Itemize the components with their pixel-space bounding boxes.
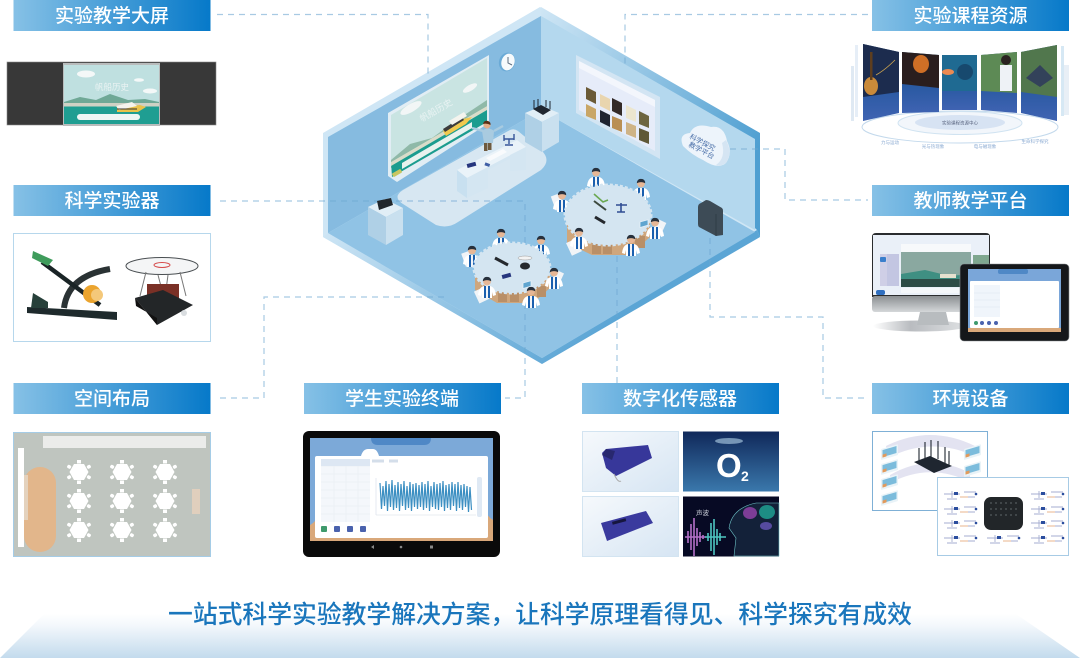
curriculum carousel: 光与热现象 [922, 143, 945, 150]
cloud [682, 125, 730, 166]
big screen on left wall: 帆船历史 [418, 96, 454, 124]
curriculum carousel: 力与运动 [881, 139, 899, 146]
heading: 实验教学大屏: 实验教学大屏 [55, 5, 169, 27]
heading: 空间布局 [14, 383, 210, 414]
heading: 实验课程资源: 实验课程资源 [913, 5, 1028, 27]
teacher [472, 121, 503, 151]
curriculum carousel: 电与磁现象 [974, 143, 997, 150]
network equipment cards [872, 432, 1068, 556]
round table group B [551, 168, 666, 256]
heading: 学生实验终端 [304, 383, 501, 414]
sensor cards: 2 [741, 468, 749, 484]
classroom furniture [368, 50, 730, 308]
heading: 环境设备 [872, 383, 1069, 414]
teacher platform [398, 129, 546, 226]
left wall [328, 16, 541, 233]
curriculum carousel [851, 44, 1069, 150]
curriculum carousel: 生命科学探究 [1022, 138, 1049, 145]
cloud: 科学探究 [688, 132, 717, 153]
clock [496, 50, 518, 74]
big screen on left wall [388, 55, 489, 182]
curriculum carousel: 实验课程资源中心 [942, 120, 978, 126]
blackboard with screen [7, 62, 216, 126]
teacher desk [457, 134, 526, 198]
cube with projector [368, 198, 403, 245]
heading: 科学实验器 [14, 185, 210, 216]
sensor cards: 声波 [696, 508, 710, 517]
sensor cards: O [716, 447, 742, 484]
blackboard with screen: 帆船历史 [95, 82, 130, 92]
student tablet with waveform [303, 431, 500, 557]
cube with router [525, 99, 559, 152]
bottom slogan: 一站式科学实验教学解决方案，让科学原理看得见、科学探究有成效 [168, 601, 912, 629]
footer band [0, 614, 1080, 658]
heading: 空间布局: 空间布局 [74, 388, 150, 410]
isometric classroom shell [323, 7, 760, 364]
heading: 教师教学平台: 教师教学平台 [913, 190, 1028, 212]
sensor cards [582, 432, 779, 556]
cloud: 教学平台 [687, 140, 716, 161]
heading: 实验课程资源 [872, 0, 1069, 31]
heading: 实验教学大屏 [14, 0, 210, 31]
heading: 教师教学平台 [872, 185, 1069, 216]
heading: 科学实验器: 科学实验器 [64, 190, 160, 212]
round table group A [461, 229, 564, 308]
floor plan [14, 432, 210, 556]
monitor and tablet [872, 233, 1069, 341]
heading: 学生实验终端: 学生实验终端 [345, 388, 459, 410]
heading: 环境设备: 环境设备 [932, 388, 1009, 410]
science instruments card [14, 234, 210, 342]
right wall [541, 16, 755, 230]
right wall screen [576, 55, 660, 159]
heading: 数字化传感器 [582, 383, 779, 414]
server [698, 200, 723, 236]
heading: 数字化传感器: 数字化传感器 [623, 388, 737, 410]
floor [328, 110, 755, 358]
connector lines [217, 14, 868, 398]
